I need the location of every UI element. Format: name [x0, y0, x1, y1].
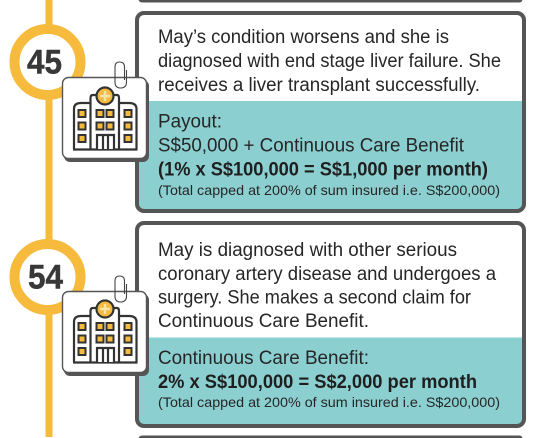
payout text: (Total capped at 200% of sum insured i.e. S$200,000): [158, 394, 500, 410]
icon: hospital note 45: [62, 62, 149, 162]
event description: May’s condition worsens and she is: [158, 27, 449, 48]
payout text: (1% x S$100,000 = S$1,000 per month): [158, 160, 488, 180]
previous card edge: [140, 0, 521, 1]
payout text: [158, 348, 500, 410]
age marker 54: 54: [28, 258, 63, 296]
icon: hospital note 54: [62, 276, 149, 376]
icon: paper clip: [115, 62, 126, 88]
event description: coronary artery disease and undergoes a: [158, 264, 496, 285]
payout text: 2% x S$100,000 = S$2,000 per month: [158, 372, 477, 393]
card body: [137, 223, 524, 426]
event description: [158, 27, 501, 96]
payout text: (Total capped at 200% of sum insured i.e. S$200,000): [158, 182, 500, 198]
icon: hospital building: [73, 88, 138, 150]
payout text: [158, 112, 500, 198]
timeline line: [46, 0, 52, 437]
panel: age 54 card: [137, 223, 524, 426]
icon: hospital building: [73, 300, 138, 362]
event description: surgery. She makes a second claim for: [158, 288, 472, 308]
event description: May is diagnosed with other serious: [158, 240, 457, 261]
note shadow: [64, 80, 149, 162]
payout band: [137, 338, 524, 426]
payout text: Payout:: [158, 112, 222, 132]
panel: age 45 card: [137, 13, 524, 211]
payout text: Continuous Care Benefit:: [158, 348, 369, 369]
event description: Continuous Care Benefit.: [158, 311, 369, 332]
note shadow: [64, 294, 149, 376]
card border: [137, 223, 524, 426]
age marker 45: 45: [27, 44, 62, 82]
payout text: S$50,000 + Continuous Care Benefit: [158, 136, 465, 156]
next card edge: [140, 437, 521, 438]
event description: receives a liver transplant successfully.: [158, 75, 480, 96]
age marker 45: [14, 29, 80, 95]
note: [62, 78, 146, 158]
card border: [137, 13, 524, 211]
icon: paper clip: [115, 276, 126, 302]
card body: [137, 13, 524, 211]
event description: [158, 240, 496, 332]
payout band: [137, 101, 524, 211]
age marker 54: [14, 244, 80, 310]
event description: diagnosed with end stage liver failure. She: [158, 51, 501, 72]
note: [62, 292, 146, 372]
